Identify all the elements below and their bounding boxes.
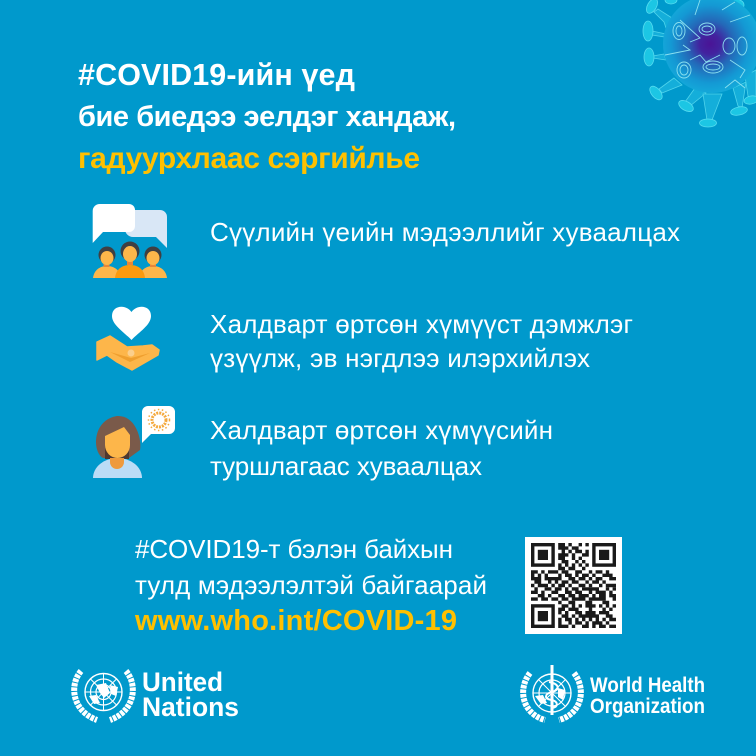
- icon: people sharing speech bubbles: [93, 204, 167, 278]
- text: stay informed call to action: [134, 534, 487, 637]
- title: бие биедээ эелдэг хандаж,: [78, 101, 456, 133]
- icon: heart over open hand: [97, 307, 159, 370]
- title: #COVID19-ийн үед: [78, 58, 355, 92]
- QR code: [525, 537, 622, 634]
- wordmark: World Health Organization: [590, 674, 705, 718]
- text: amplify voices: туршлагаас хуваалцах: [210, 451, 482, 481]
- emblem: WHO staff, globe and wreath: [523, 665, 581, 720]
- logo: World Health Organization: [523, 665, 705, 720]
- wordmark: United Nations: United: [142, 667, 223, 697]
- wordmark: World Health Organization: World Health: [590, 674, 705, 697]
- emblem: UN globe and wreath: [74, 671, 133, 720]
- icon: coronavirus illustration: [643, 0, 756, 127]
- wordmark: World Health Organization: Organization: [590, 695, 705, 718]
- text: stay informed call to action: www.who.int/COVID-19: [134, 605, 457, 637]
- text: support for affected people: [210, 309, 633, 373]
- title: гадуурхлаас сэргийлье: [78, 142, 420, 175]
- text: amplify voices: [210, 415, 553, 481]
- text: support for affected people: Халдварт өртсөн хүмүүст дэмжлэг: [210, 309, 633, 339]
- text: support for affected people: үзүүлж, эв нэгдлээ илэрхийлэх: [210, 343, 590, 373]
- text: share facts: Сүүлийн үеийн мэдээллийг хуваалцах: [210, 217, 680, 247]
- wordmark: United Nations: Nations: [142, 692, 239, 722]
- title: [78, 58, 456, 175]
- text: stay informed call to action: #COVID19-т бэлэн байхын: [135, 534, 453, 564]
- text: stay informed call to action: тулд мэдээлэлтэй байгаарай: [135, 570, 487, 600]
- icon: woman with virus speech bubble: [93, 406, 175, 478]
- logo: United Nations: [74, 667, 239, 722]
- wordmark: United Nations: [142, 667, 239, 722]
- text: amplify voices: Халдварт өртсөн хүмүүсийн: [210, 415, 553, 445]
